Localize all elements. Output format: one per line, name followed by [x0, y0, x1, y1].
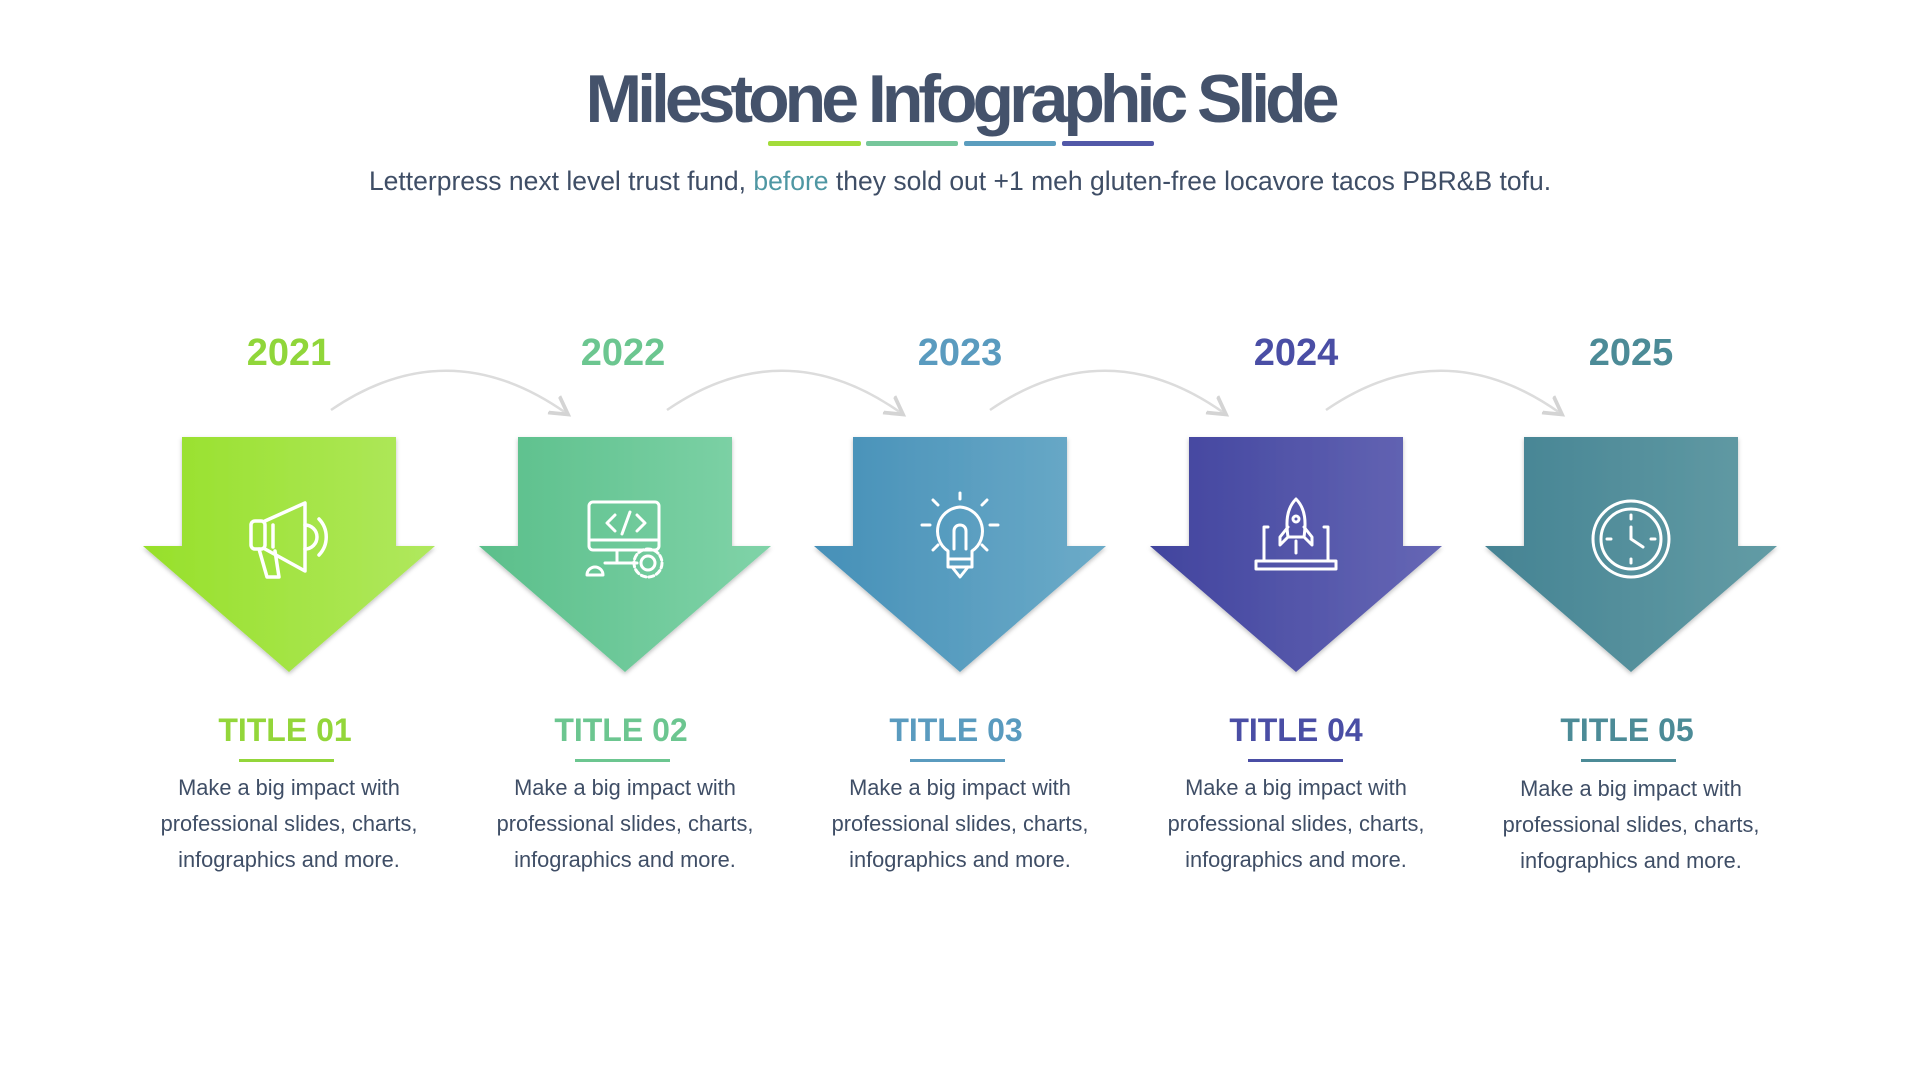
arrow 2	[479, 437, 771, 672]
title 05: TITLE 05	[1560, 712, 1694, 748]
text 2: Make a big impact with professional slides, charts, infographics and more.	[497, 775, 753, 872]
subtitle: Letterpress next level trust fund, before they sold out +1 meh gluten-free locavore tacos PBR&B tofu.	[369, 166, 1551, 196]
title 02: TITLE 02	[554, 712, 688, 748]
column 3	[832, 332, 1088, 872]
year 2023: 2023	[918, 332, 1002, 374]
text 4: Make a big impact with professional slides, charts, infographics and more.	[1168, 775, 1424, 872]
icon: megaphone	[251, 503, 326, 577]
arrow 1	[143, 437, 435, 672]
year 2021: 2021	[247, 332, 331, 374]
title 01: TITLE 01	[218, 712, 352, 748]
text 1: Make a big impact with professional slides, charts, infographics and more.	[161, 775, 417, 872]
arrow 3	[814, 437, 1106, 672]
year 2025: 2025	[1589, 332, 1673, 374]
column 5	[1503, 332, 1759, 873]
title 04: TITLE 04	[1229, 712, 1363, 748]
text 5: Make a big impact with professional slides, charts, infographics and more.	[1503, 776, 1759, 873]
arrow 5	[1485, 437, 1777, 672]
arrow 4	[1150, 437, 1442, 672]
icon: lightbulb	[922, 493, 998, 577]
icon: code monitor	[587, 502, 662, 577]
year 2024: 2024	[1254, 332, 1338, 374]
column 4	[1168, 332, 1424, 872]
arc arrows	[331, 371, 1560, 413]
title underline bars	[768, 141, 1154, 146]
title: Milestone Infographic Slide	[585, 61, 1335, 137]
text 3: Make a big impact with professional slides, charts, infographics and more.	[832, 775, 1088, 872]
column 1	[161, 332, 417, 872]
icon: clock	[1593, 501, 1669, 577]
icon: rocket laptop	[1256, 499, 1336, 569]
year 2022: 2022	[581, 332, 665, 374]
title 03: TITLE 03	[889, 712, 1023, 748]
column 2	[497, 332, 753, 872]
